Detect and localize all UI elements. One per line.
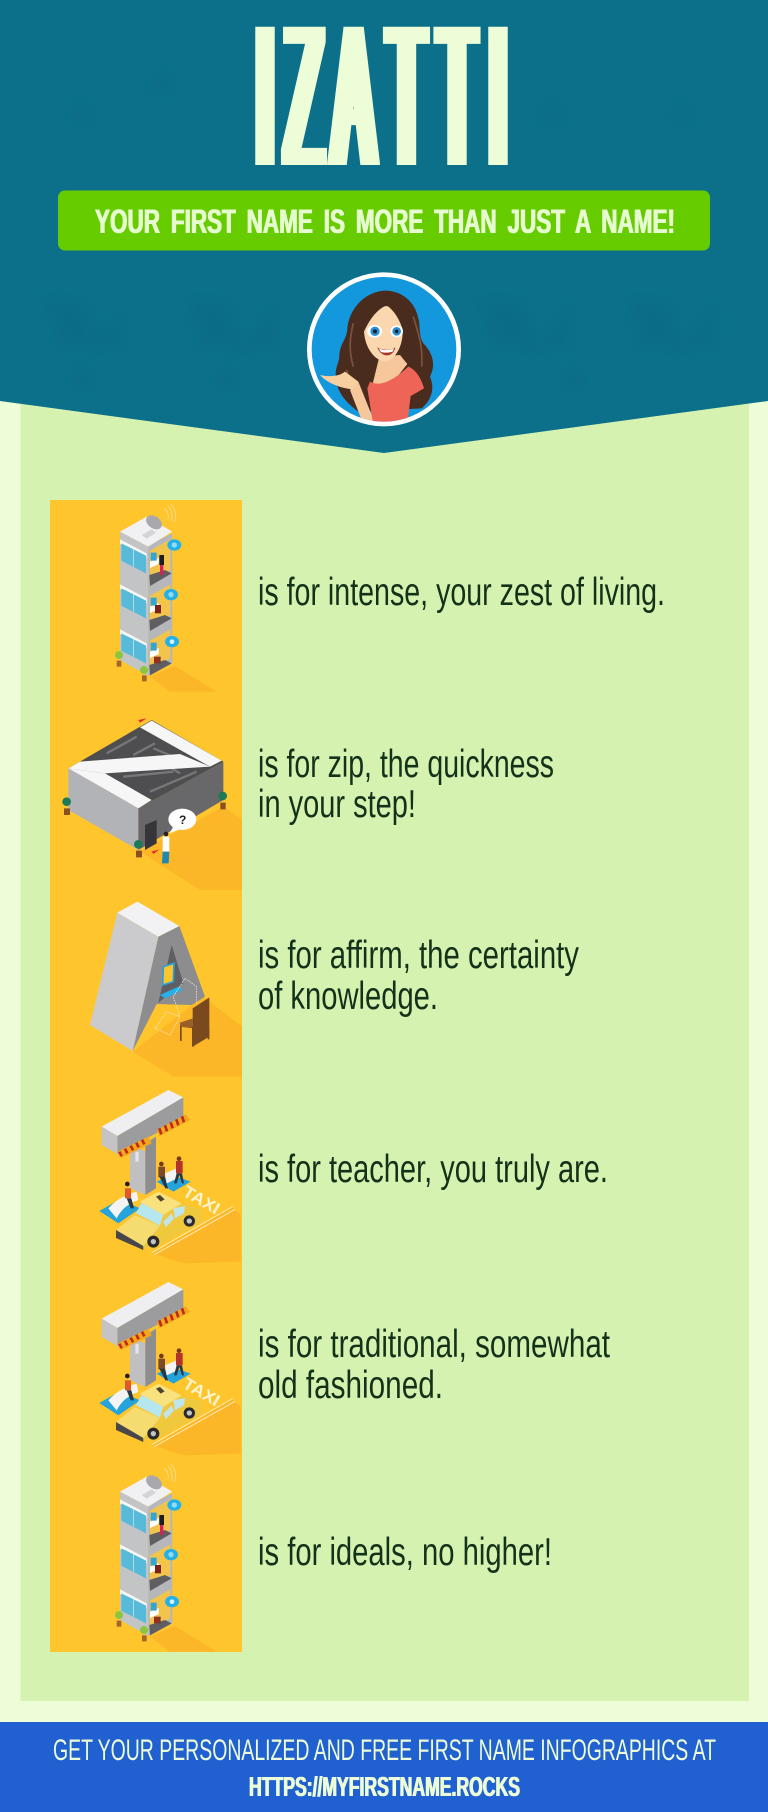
tile T: taxi stand (second): TAXI (180, 1374, 223, 1410)
tile A: letter building (90, 902, 242, 1077)
text: T second (258, 1323, 610, 1407)
tile T: taxi stand (second) (99, 1282, 241, 1455)
text: A (258, 934, 579, 1018)
text: Z: in your step! (258, 783, 416, 826)
text: I second: is for ideals, no higher! (258, 1531, 552, 1574)
text: A: of knowledge. (258, 975, 438, 1018)
text: T second: is for traditional, somewhat (258, 1323, 610, 1366)
tiles background (50, 500, 242, 1652)
tile Z: maze block (62, 718, 242, 890)
speech bubble: ? (179, 813, 186, 827)
speech bubble (168, 809, 196, 833)
text: T second: old fashioned. (258, 1364, 443, 1407)
text: A: is for affirm, the certainty (258, 934, 579, 977)
footer: HTTPS://MYFIRSTNAME.ROCKS (249, 1771, 520, 1802)
text: Z: is for zip, the quickness (258, 743, 554, 786)
avatar (307, 272, 461, 426)
tagline bar (58, 190, 710, 250)
header banner (0, 0, 768, 453)
text: Z (258, 743, 554, 826)
tile I: tower (second) (115, 1464, 217, 1652)
tile T: taxi stand (99, 1090, 241, 1263)
text: T: is for teacher, you truly are. (258, 1148, 608, 1191)
footer (0, 1722, 768, 1812)
white letter Z (68, 721, 222, 808)
tile I: tower (115, 504, 217, 692)
tile T: taxi stand: TAXI (180, 1182, 223, 1218)
panel: content body (20, 380, 749, 1701)
